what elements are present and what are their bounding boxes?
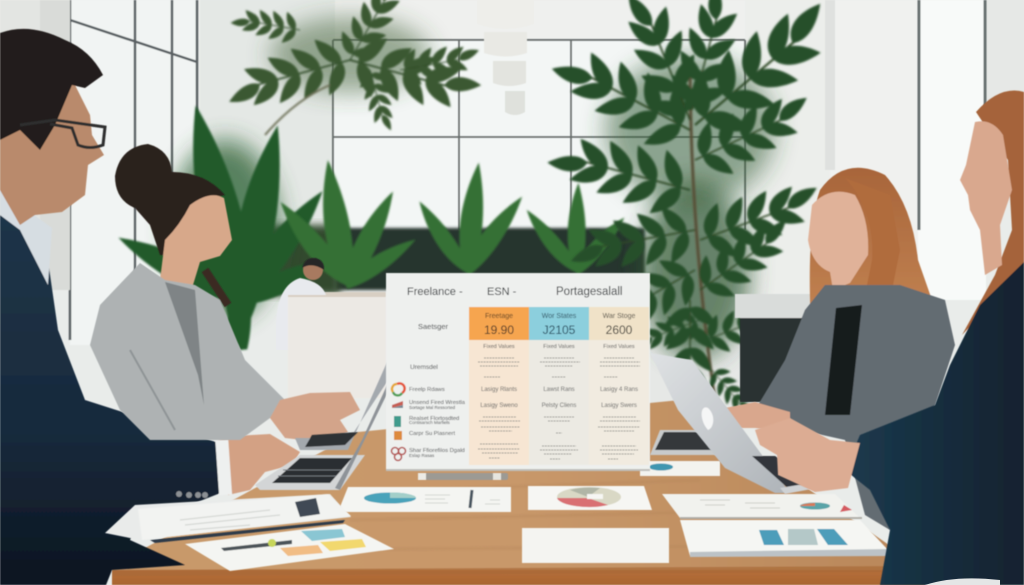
orange price cell (469, 307, 529, 340)
laptop: right woman's small laptop (650, 430, 755, 455)
document: colour block sheet (185, 524, 394, 571)
document: booklet with blue bars (680, 520, 889, 557)
chart headers: Portagesalall (556, 286, 622, 298)
woman: grey blazer (90, 263, 290, 440)
beige price cell: War Stoge (603, 313, 636, 320)
panel: comparison chart (386, 273, 650, 471)
person: woman right (725, 168, 955, 530)
chart headers: Freelance - (407, 286, 463, 298)
document: notes with pie (662, 494, 862, 519)
man: shirt collar (0, 190, 52, 285)
row labels with icons: Freelp Rdaws (409, 387, 445, 393)
document: pie chart sheet (338, 487, 511, 512)
large fern right (537, 0, 858, 424)
row label: saetager: Saetsger (418, 322, 449, 331)
pendant lights (477, 0, 534, 115)
man: hair (0, 29, 103, 150)
pen (418, 473, 508, 480)
woman: hands (270, 392, 360, 442)
document: stapled report left (105, 494, 351, 543)
row labels with icons: Unsend Fired Wrestla (409, 400, 466, 406)
row: fixed values: Fixed Values (543, 344, 575, 350)
beige price cell (589, 307, 649, 340)
woman: black top (825, 305, 862, 415)
row labels with icons: Realset Flortosdted (409, 416, 459, 422)
row labels with icons: Shar Ffiorefilos Dgald (409, 448, 465, 454)
plant behind woman (112, 101, 340, 355)
right window (825, 0, 986, 300)
centre window (333, 40, 745, 235)
blue price cell: Wor States (542, 313, 577, 320)
row texts: Lawst Rans (543, 387, 575, 393)
man: suit body (0, 205, 228, 585)
chart headers (407, 286, 622, 298)
woman: suit (845, 262, 1024, 585)
icon: red knot (392, 448, 406, 460)
dark greenery band (250, 225, 645, 295)
row texts (480, 387, 638, 409)
person: woman with bun (90, 144, 360, 442)
left window wall (0, 0, 198, 345)
woman: hair bun and hair (115, 144, 225, 258)
man: glasses (20, 120, 105, 148)
woman: back hair (810, 168, 932, 355)
woman: face (808, 192, 868, 290)
row labels with icons: Eslap Rasas (409, 453, 435, 458)
icon: coloured ring (392, 383, 405, 395)
document: blank sheet (522, 528, 669, 563)
orange price cell: 19.90 (484, 323, 514, 337)
cream column tint (469, 339, 529, 465)
row label: memorial: Uremsdel (410, 364, 438, 371)
icon: stacked tray (392, 401, 403, 408)
reception desk with distant person (276, 258, 386, 398)
woman: hair (962, 91, 1024, 335)
chart board (386, 273, 650, 471)
woman: face (160, 195, 232, 285)
fine print paragraphs (478, 358, 640, 459)
row labels with icons: Carpr Su Plasnert (409, 431, 455, 437)
person: man left (0, 29, 300, 585)
beige price cell: 2600 (606, 323, 633, 337)
row texts: Lasigy 4 Rans (600, 387, 638, 393)
row labels with icons: Contisarsch Marfiels (409, 420, 451, 425)
woman: hands (755, 418, 860, 492)
row texts: Lasigy Sweno (480, 403, 518, 409)
icon: green tablet (394, 416, 401, 427)
dark cabinet right (735, 294, 820, 402)
row labels with icons (409, 387, 466, 458)
blue price cell (529, 307, 589, 340)
man: cuff and hand (218, 434, 300, 495)
document: back chart sheet right (640, 461, 720, 476)
woman: face (960, 121, 1012, 275)
hanging plant top centre (217, 0, 489, 136)
man: sleeve buttons (176, 491, 208, 498)
woman: blazer (755, 285, 955, 530)
row: fixed values: Fixed Values (483, 344, 515, 350)
laptop: silver laptop right (650, 353, 822, 494)
row: fixed values (483, 344, 635, 350)
chart headers: ESN - (487, 286, 517, 298)
row texts: Lasigy Swers (601, 403, 637, 409)
centre plants (271, 158, 629, 293)
document: red pie sheet (528, 486, 652, 510)
laptop: man's (255, 347, 410, 490)
icon: orange block (394, 431, 402, 440)
chair edge (925, 578, 1000, 585)
person: woman far right (755, 91, 1024, 585)
row: fixed values: Fixed Values (603, 344, 635, 350)
orange price cell: Freetage (485, 313, 513, 320)
row labels with icons: Sortage Mal Ressorted (409, 405, 456, 410)
woman: hands (725, 402, 790, 430)
blue price cell: J2105 (543, 323, 576, 337)
man: neck and head (0, 70, 104, 225)
row texts: Lasigy Rlants (481, 387, 517, 393)
row texts: Pelsty Cliens (542, 403, 576, 409)
table (112, 400, 925, 585)
laptop: woman's (295, 347, 410, 450)
